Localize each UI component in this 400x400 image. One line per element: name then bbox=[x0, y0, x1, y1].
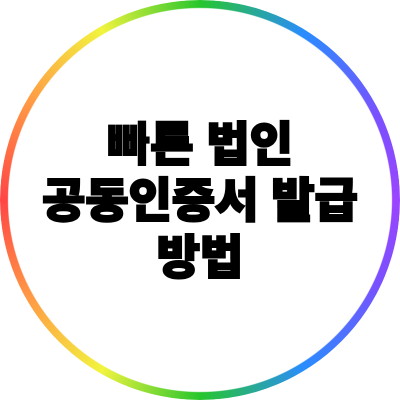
title line 1: 빠른 법인 bbox=[107, 118, 293, 171]
title line 3: 방법 bbox=[157, 231, 243, 284]
title line 2: 공동인증서 발급 bbox=[42, 174, 358, 227]
